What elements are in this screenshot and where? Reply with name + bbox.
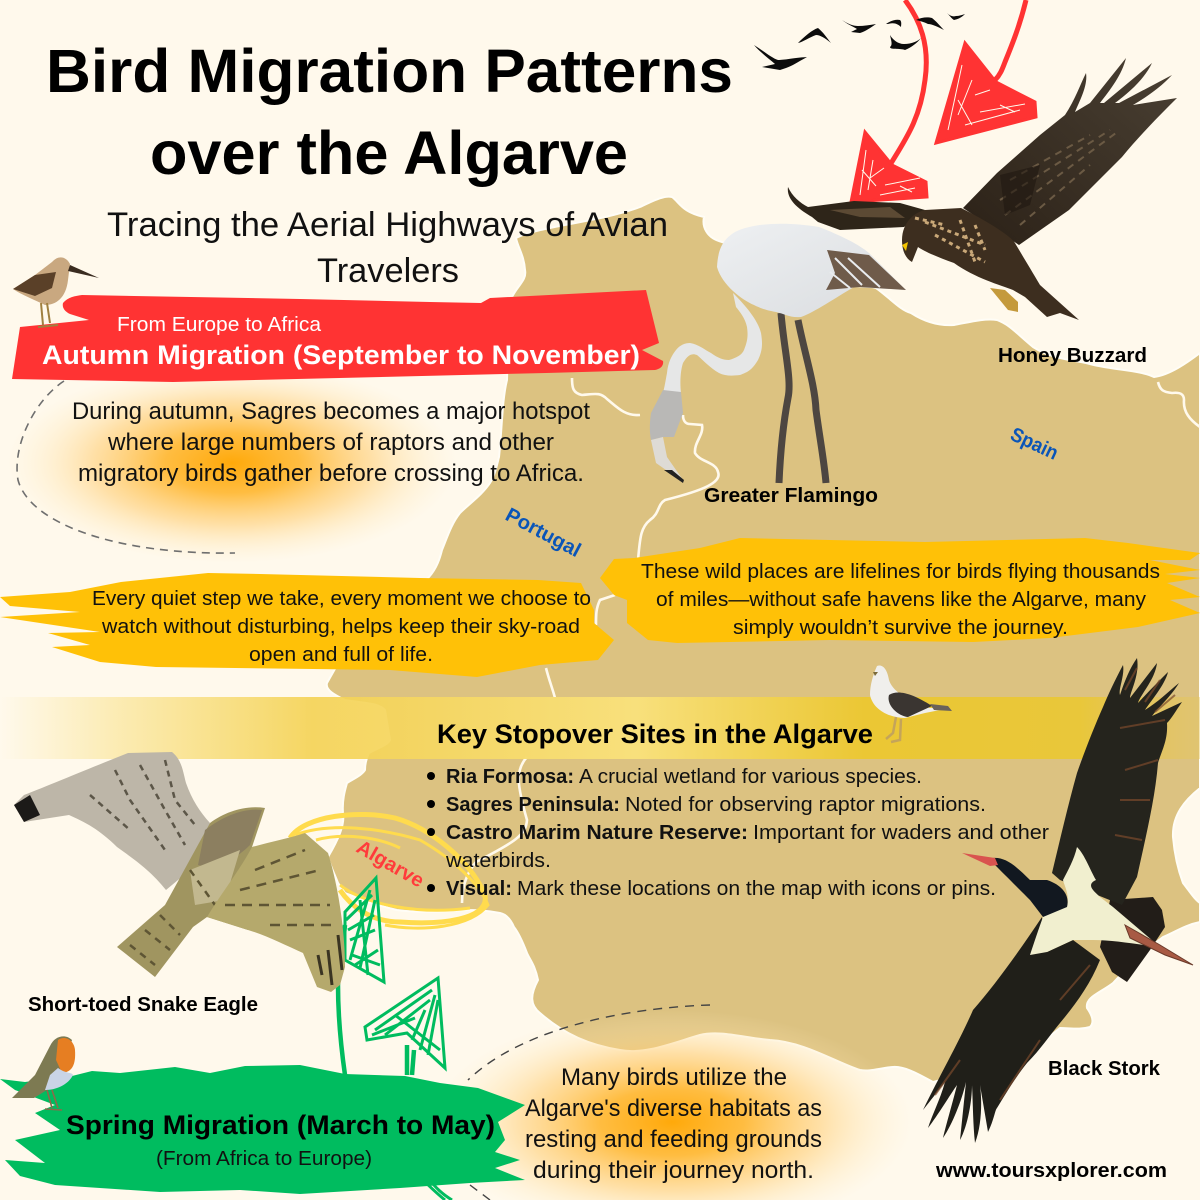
subtitle: Tracing the Aerial Highways of Avian [107, 206, 668, 244]
text: right note: of miles—without safe havens like the Algarve, many [656, 589, 1146, 611]
panel: spring banner [0, 1065, 525, 1194]
dashed arc: autumn [17, 381, 235, 553]
text: autumn description: where large numbers of raptors and other [107, 429, 554, 456]
text: spring description: resting and feeding grounds [525, 1126, 822, 1153]
glow: autumn text [7, 363, 457, 563]
stork upper wing [1052, 658, 1182, 905]
text: autumn direction: From Europe to Africa [117, 314, 322, 336]
eagle right wing [207, 833, 345, 992]
yellow scribble around the Algarve [290, 814, 488, 928]
caption: black stork: Black Stork [1048, 1058, 1161, 1080]
illustration: short-toed snake eagle [14, 752, 345, 992]
text: left note: Every quiet step we take, every moment we choose to [92, 588, 591, 610]
list: stopover sites: Ria Formosa: [446, 766, 574, 788]
illustration: sandpiper [13, 257, 99, 327]
buzzard right wing [963, 58, 1177, 245]
text: autumn description: During autumn, Sagres becomes a major hotspot [72, 398, 590, 425]
caption: short-toed snake eagle: Short-toed Snake Eagle [28, 994, 258, 1016]
stork lower wing [923, 917, 1100, 1143]
map: Portugal–Spain border [462, 378, 719, 903]
eagle left wing [14, 752, 210, 890]
panel: right yellow brush note [600, 538, 1200, 643]
stork tail [1100, 897, 1165, 982]
buzzard body and tail [902, 208, 1079, 320]
text: autumn description: migratory birds gather before crossing to Africa. [78, 460, 584, 487]
illustration: honey buzzard [788, 58, 1177, 320]
map label: Portugal: Portugal [502, 504, 584, 562]
band: key stopover sites [0, 697, 1200, 759]
flamingo legs [779, 313, 826, 483]
text: autumn heading: Autumn Migration (September to November) [42, 340, 640, 370]
glow: spring text [432, 1010, 912, 1200]
stork white belly [1030, 847, 1160, 955]
text: left note: open and full of life. [249, 644, 433, 666]
list: stopover sites: Mark these locations on the map with icons or pins. [517, 878, 996, 900]
map label: Algarve: Algarve [352, 836, 428, 892]
green tail arrow at the bottom [418, 1175, 452, 1200]
subtitle: Travelers [317, 252, 459, 290]
text: left note: watch without disturbing, helps keep their sky-road [101, 616, 580, 638]
red arrow 2 [936, 0, 1036, 143]
caption: greater flamingo: Greater Flamingo [704, 485, 878, 507]
list: stopover sites: A crucial wetland for various species. [579, 766, 922, 788]
map label: Spain: Spain [1007, 424, 1061, 465]
green arrow 1 [338, 878, 384, 1075]
list: stopover sites [427, 766, 1049, 900]
text: right note: These wild places are lifelines for birds flying thousands [641, 561, 1160, 583]
list: stopover sites: Noted for observing raptor migrations. [625, 794, 986, 816]
text: autumn description [72, 398, 590, 487]
flamingo body [717, 224, 906, 317]
red arrow 1 [851, 0, 927, 202]
list: stopover sites: Sagres Peninsula: [446, 794, 620, 816]
panel: autumn banner [12, 290, 663, 382]
map: Spain east border [1158, 382, 1200, 427]
flamingo neck [663, 293, 762, 393]
text: spring direction: (From Africa to Europe) [156, 1148, 372, 1170]
text: spring heading: Spring Migration (March to May) [66, 1110, 495, 1140]
text: spring description: Many birds utilize the [561, 1064, 787, 1091]
website url: www.toursxplorer.com [935, 1160, 1167, 1182]
title: Bird Migration Patterns [46, 37, 733, 105]
list: stopover sites: Visual: [446, 878, 512, 900]
green arrow 2 [365, 978, 445, 1075]
list: stopover sites: Castro Marim Nature Reserve: [446, 822, 748, 844]
stork neck and bill [993, 858, 1068, 917]
illustration: gull [870, 666, 952, 742]
map: Iberian land mass [327, 197, 1200, 1082]
flamingo head and bill [650, 390, 683, 440]
text: spring description [525, 1064, 822, 1184]
caption: honey buzzard: Honey Buzzard [998, 345, 1147, 367]
icon: flock of birds [754, 13, 965, 70]
illustration: robin [12, 1036, 75, 1110]
heading: key stopover sites: Key Stopover Sites in the Algarve [437, 719, 873, 749]
list: stopover sites: waterbirds. [445, 850, 551, 872]
list: stopover sites: Important for waders and other [753, 822, 1049, 844]
title [46, 37, 733, 187]
subtitle [107, 206, 668, 290]
illustration: greater flamingo [650, 224, 906, 483]
text: right note: simply wouldn’t survive the journey. [733, 617, 1068, 639]
title: over the Algarve [150, 119, 628, 187]
illustration: black stork [923, 658, 1193, 1143]
dashed arc: spring [468, 1005, 710, 1200]
buzzard foot [990, 288, 1018, 312]
stork legs [1125, 925, 1193, 965]
text: spring description: Algarve's diverse habitats as [525, 1095, 822, 1122]
text: right note [641, 561, 1160, 639]
text: left note [92, 588, 591, 666]
panel: left yellow brush note [0, 573, 614, 677]
eagle tail and body [117, 807, 265, 977]
buzzard left wing [788, 187, 925, 230]
flamingo wing feathers [826, 250, 906, 290]
text: spring description: during their journey north. [533, 1157, 814, 1184]
